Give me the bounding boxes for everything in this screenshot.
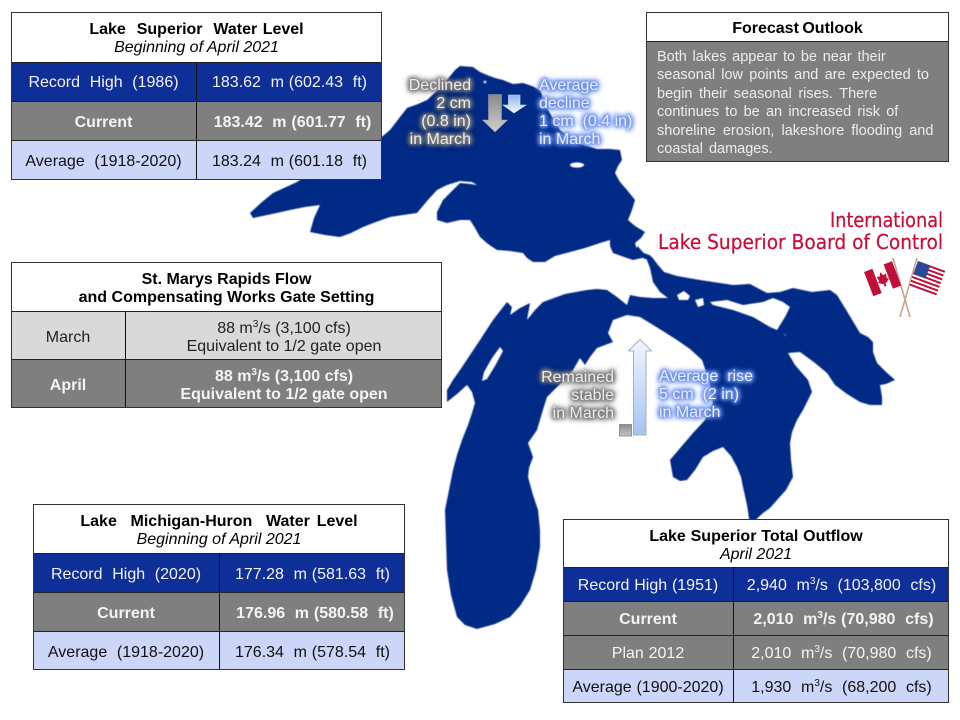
value: current [196,101,382,140]
row: record high: Record High (1986) [28,74,179,91]
label: Superior average decline: Average [539,77,598,94]
table heading: Lake Superior Water Level [89,21,304,38]
table heading: St. Marys Rapids Flow [142,270,311,288]
row: Plan 2012 [563,635,733,669]
table heading [11,262,442,311]
forecast text: begin their seasonal rises. There [657,86,877,102]
value: April [125,359,442,408]
row: current [563,601,733,635]
lake: Michigan-Huron [445,255,895,629]
value: current: 2,010 m3/s (70,980 cfs) [753,610,934,628]
value: average: 176.34 m (578.54 ft) [235,644,390,661]
logo: International Lake Superior Board of Control: Lake Superior Board of Control [658,230,943,254]
panel: Forecast Outlook [646,12,949,162]
value: average [733,669,949,703]
forecast text: Both lakes appear to be near their [657,49,886,65]
row: average: Average (1918-2020) [48,644,204,661]
forecast heading [646,12,949,42]
table: Lake Superior Water Level [11,12,382,180]
label: Michigan-Huron remained stable: in March [553,405,614,422]
forecast text [657,49,933,157]
value: current [733,601,949,635]
row: record high [33,553,219,592]
row: current [11,101,196,140]
row: record high [563,567,733,601]
value: Plan 2012: 2,010 m3/s (70,980 cfs) [751,644,932,662]
label: Michigan-Huron average rise: Average rise [659,368,753,385]
table: Lake Superior Total Outflow [563,519,949,703]
label: Michigan-Huron average rise: in March [659,404,720,421]
table heading [563,519,949,567]
value: record high: 183.62 m (602.43 ft) [212,74,367,91]
value: record high [196,62,382,101]
table: Lake Michigan-Huron Water Level [33,504,405,670]
row: record high: Record High (2020) [51,566,201,583]
value: Plan 2012 [733,635,949,669]
table heading: April 2021 [720,546,792,562]
row: average: Average (1918-2020) [25,152,182,170]
row: record high: Record High (1951) [578,576,718,594]
forecast text: seasonal low points and are expected to [657,67,929,83]
table heading: Beginning of April 2021 [137,530,301,548]
value: average [219,631,405,670]
label: Superior average decline: decline [539,95,590,112]
islands and channels [482,80,790,381]
forecast text: shoreline erosion, lakeshore flooding and [657,123,933,139]
row: average [11,140,196,180]
arrow: Superior observed decline [482,94,508,132]
label: Michigan-Huron remained stable: stable [571,387,614,404]
label: Superior declined: 2 cm [436,95,471,112]
value: April: 88 m3/s (3,100 cfs) [215,367,353,385]
label: Superior declined: Declined [409,77,471,94]
logo: International Lake Superior Board of Control [658,208,943,254]
value: March [125,311,442,359]
value: average: 1,930 m3/s (68,200 cfs) [751,678,932,696]
label: Superior declined: in March [410,131,471,148]
label: Michigan-Huron remained stable: Remained [541,369,614,386]
value: record high [219,553,405,592]
forecast text: continues to be an increased risk of [657,104,898,120]
value: March: 88 m3/s (3,100 cfs) [217,318,351,336]
row: average: Average (1900-2020) [572,678,724,696]
row: current: Current [97,605,155,622]
value: March: Equivalent to 1/2 gate open [187,338,381,354]
row: average [33,631,219,670]
row: current: Current [75,114,132,131]
value: average [196,140,382,180]
value: record high: 177.28 m (581.63 ft) [235,566,390,583]
table heading: Lake Michigan-Huron Water Level [80,512,358,530]
lake: Superior [250,66,895,629]
row: current [33,592,219,631]
marker: Michigan-Huron stable [620,424,632,436]
row: March [11,311,125,359]
value: current: 183.42 m (601.77 ft) [214,114,371,131]
table heading: and Compensating Works Gate Setting [79,288,374,306]
table heading [11,12,382,62]
row: March: March [46,328,90,346]
table heading: Beginning of April 2021 [114,39,279,56]
value: current [219,592,405,631]
label: Superior declined: (0.8 in) [421,113,471,130]
table heading: Lake Superior Total Outflow [649,528,863,544]
row: April: April [50,377,86,394]
row: record high [11,62,196,101]
channel: St. Marys River [636,248,650,258]
label: Superior declined [404,74,476,150]
row: April [11,359,125,408]
logo: International Lake Superior Board of Control: International [830,208,943,232]
label: Michigan-Huron remained stable [536,366,619,424]
label: Superior average decline: in March [539,131,600,148]
label: Superior average decline: 1 cm (0.4 in) [539,113,632,130]
value: current: 176.96 m (580.58 ft) [236,605,394,622]
label: Superior average decline [534,74,637,149]
table heading [33,504,405,553]
arrow: Superior average decline [503,95,526,113]
value: April: Equivalent to 1/2 gate open [180,386,388,403]
row: Plan 2012: Plan 2012 [612,644,684,662]
forecast text: coastal damages. [657,141,773,157]
label: Michigan-Huron average rise [654,365,757,423]
icon: crossed Canadian and American flags [864,258,945,317]
row: average [563,669,733,703]
value: record high: 2,940 m3/s (103,800 cfs) [747,576,936,594]
value: record high [733,567,949,601]
arrow: Michigan-Huron average rise [628,340,652,435]
table: St. Marys Rapids Flow [11,262,442,408]
label: Michigan-Huron average rise: 5 cm (2 in) [659,386,739,403]
row: current: Current [619,610,677,628]
value: average: 183.24 m (601.18 ft) [212,152,367,170]
forecast heading: Forecast Outlook [732,20,863,36]
